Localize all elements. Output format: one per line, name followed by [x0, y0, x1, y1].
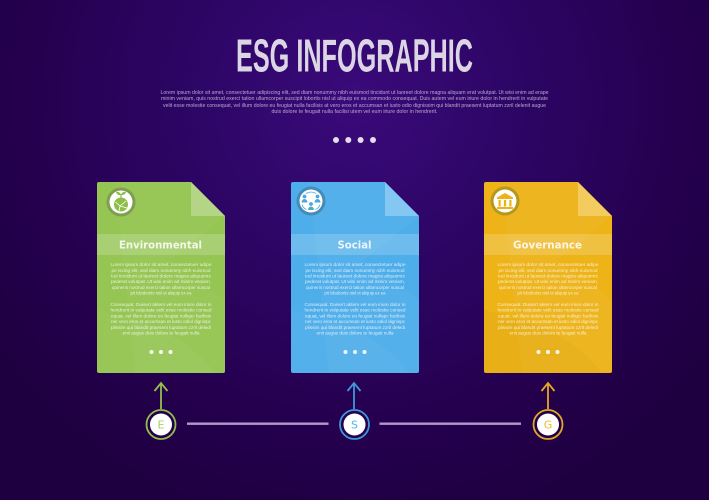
heading band [291, 234, 419, 255]
folded corner [578, 182, 612, 216]
icon: connected people [296, 186, 326, 216]
body text: ner vero eros et accumsan et iusto odiol dignispc [305, 319, 406, 324]
heading band [484, 234, 612, 255]
card dots [536, 350, 560, 354]
intro text block: minim veniam, quis nostrud exerci tation ullamcorper suscipit lobortis nisl ut aliquip ex ea commodo consequat. Duis autem vel eum iriure dolor in hendrerit in vulputate [161, 96, 548, 102]
connector line: E to S [187, 422, 328, 425]
intro text block [160, 90, 549, 115]
node: E [146, 410, 176, 439]
arrow: S up to social [348, 383, 360, 409]
icon: institution building [490, 186, 520, 216]
node: E: E [158, 418, 165, 432]
arrow: E up to environmental [154, 383, 168, 409]
heading: Social: Social [338, 238, 372, 252]
body text: Lorem ipsum dolor sit amet, consectetuer adipe [304, 262, 406, 267]
title dots [333, 137, 376, 143]
intro text block: Lorem ipsum dolor sit amet, consectetuer adipiscing elit, sed diam nonummy nibh euismod tincidunt ut laoreet dolore magna aliquam erat volutpat. Ut wisi enim ad erape [160, 90, 549, 96]
body text: ner vero eros et accumsan et iusto odiol dignispc [498, 319, 599, 324]
folded corner [385, 182, 419, 216]
body text: hendrerit in vulputate velit esse molestie consed [304, 308, 406, 313]
icon: globe with sprout [106, 188, 136, 216]
body text: enit augue duis dolore te feugait nulla [510, 330, 587, 336]
card dots [344, 350, 366, 354]
body text: quineris nostrud exerci tation ullamcorper suscal [112, 285, 210, 290]
connector line: S to G [380, 422, 521, 425]
body text: tod tincidunt ut laoreet dolore magna aliquamrc [498, 274, 599, 278]
heading band [97, 234, 225, 255]
panel: governance [484, 182, 612, 373]
body text: plissim qui blandit praesent luptatum zzril deledi [111, 325, 211, 330]
body text: ner vero eros et accumsan et iusto odiol dignispc [111, 319, 212, 324]
body text: equat, vel illum dolore eu feugiat nullapc facilisis [498, 313, 599, 318]
heading: Environmental: Environmental [119, 238, 202, 252]
body text: pit lobobortis nisl ut aliquip ex ea [324, 291, 386, 296]
intro text block: duis dolore te feugait nulla facilisi utem vel eum iriure dolor in hendrerit. [272, 109, 438, 115]
body text [498, 262, 599, 336]
body text: plissim qui blandit praesent luptatum zzril deledi [305, 325, 405, 330]
body text: hendrerit in vulputate velit esse molestie consed [110, 308, 212, 313]
body text: enit augue duis dolore te feugait nulla [122, 330, 200, 336]
node: S: S [351, 418, 358, 432]
node: G [534, 410, 562, 439]
body text: pe iscing elit, sed diam nonummy nibh euismod [498, 268, 598, 273]
body text: tod tincidunt ut laoreet dolore magna aliquamrc [305, 274, 406, 278]
body text: pederat volutpat. Ut wisi enim ad minim veniam, [111, 279, 211, 284]
body text [110, 262, 212, 336]
body text: pederat volutpat. Ut wisi enim ad minim veniam, [305, 279, 405, 284]
title: ESG INFOGRAPHIC [236, 30, 473, 82]
body text: equat, vel illum dolore eu feugiat nullapc facilisis [111, 313, 212, 318]
body text: quineris nostrud exerci tation ullamcorper suscal [306, 285, 404, 290]
body text: tod tincidunt ut laoreet dolore magna aliquamrc [111, 274, 212, 278]
body text [304, 262, 406, 336]
folded corner [191, 182, 225, 216]
heading: Governance: Governance [513, 238, 582, 252]
body text: Consequat. Duisert aktem vel eum iriure dolor in [304, 302, 406, 307]
body text: equat, vel illum dolore eu feugiat nullapc facilisis [305, 313, 406, 318]
body text: enit augue duis dolore te feugait nulla [316, 330, 394, 336]
body text: pe iscing elit, sed diam nonummy nibh euismod [306, 268, 405, 273]
card dots [150, 350, 172, 354]
body text: pe iscing elit, sed diam nonummy nibh euismod [112, 268, 211, 273]
body text: Consequat. Duisert aktem vel eum iriure dolor in [110, 302, 212, 307]
node: G: G [544, 418, 552, 432]
body text: pederat volutpat. Ut wisi enim ad minim veniam, [498, 279, 598, 284]
body text: pit lobobortis nisl ut aliquip ex ea [130, 291, 192, 296]
panel: environmental [97, 182, 225, 373]
body text: Consequat. Duisert aktem vel eum iriure dolor in [498, 302, 599, 307]
body text: hendrerit in vulputate velit esse molestie consed [498, 308, 599, 313]
body text: Lorem ipsum dolor sit amet, consectetuer adipe [498, 262, 599, 267]
body text: quineris nostrud exerci tation ullamcorper suscal [499, 285, 597, 290]
panel: social [291, 182, 419, 373]
arrow: G up to governance [542, 383, 554, 409]
node: S [340, 410, 369, 439]
intro text block: velit esse molestie consequat, vel illum dolore eu feugiat nulla facilisis at vero eros et accumsan et iusto odio dignissim qui blandit praesent luptatum zzril delenit augue [163, 103, 546, 109]
body text: pit lobobortis nisl ut aliquip ex ea [518, 291, 579, 296]
body text: Lorem ipsum dolor sit amet, consectetuer adipe [110, 262, 212, 267]
body text: plissim qui blandit praesent luptatum zzril deledi [498, 325, 598, 330]
